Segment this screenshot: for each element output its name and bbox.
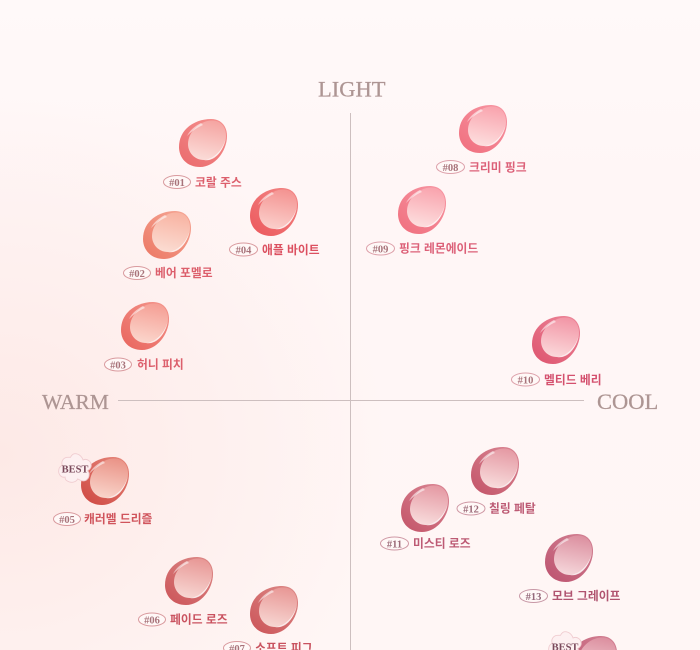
swatch 13 bbox=[520, 534, 621, 603]
swatch 04: #04 bbox=[236, 246, 252, 256]
badge: BEST: BEST bbox=[62, 464, 88, 476]
swatch 02: 베어 포멜로 bbox=[155, 266, 213, 280]
swatch 09: #09 bbox=[373, 244, 388, 256]
swatch 13: #13 bbox=[526, 592, 541, 603]
swatch 08: 크리미 핑크 bbox=[469, 160, 527, 174]
swatch 01 bbox=[164, 119, 242, 190]
swatch 08 bbox=[436, 105, 527, 174]
swatch 10 bbox=[512, 316, 602, 387]
swatch 06: 페이드 로즈 bbox=[170, 612, 228, 626]
swatch 12 bbox=[457, 447, 536, 516]
horizontal axis bbox=[118, 400, 584, 402]
swatch 06 bbox=[138, 557, 228, 626]
swatch 09 bbox=[366, 186, 478, 256]
swatch 05 with BEST badge: 캐러멜 드리즐 bbox=[84, 512, 153, 526]
axis label: COOL: COOL bbox=[597, 389, 658, 414]
swatch 02: #02 bbox=[129, 269, 145, 280]
axis label: LIGHT: LIGHT bbox=[318, 76, 386, 102]
swatch 03 bbox=[104, 302, 184, 372]
swatch 08: #08 bbox=[443, 163, 458, 174]
swatch 07 bbox=[224, 586, 313, 650]
swatch 01: 코랄 주스 bbox=[195, 176, 242, 190]
axis label: WARM: WARM bbox=[42, 390, 109, 414]
swatch 11: #11 bbox=[387, 540, 402, 550]
swatch 09: 핑크 레몬에이드 bbox=[399, 242, 478, 256]
swatch 05 with BEST badge: #05 bbox=[59, 515, 75, 526]
swatch 04: 애플 바이트 bbox=[262, 243, 320, 257]
swatch 03: 허니 피치 bbox=[137, 358, 184, 372]
swatch 10: 멜티드 베리 bbox=[544, 373, 602, 387]
swatch 10: #10 bbox=[518, 376, 533, 386]
swatch 03: #03 bbox=[110, 360, 126, 372]
swatch 04 bbox=[230, 188, 320, 257]
swatch 11: 미스티 로즈 bbox=[413, 536, 471, 550]
vertical axis bbox=[350, 113, 352, 650]
swatch 14 with BEST badge bbox=[549, 632, 617, 650]
swatch 13: 모브 그레이프 bbox=[552, 589, 621, 603]
swatch 11 bbox=[380, 484, 471, 550]
swatch 06: #06 bbox=[144, 616, 160, 626]
swatch 02 bbox=[124, 211, 213, 280]
swatch 12: 칠링 페탈 bbox=[489, 502, 536, 516]
swatch 12: #12 bbox=[463, 504, 479, 516]
swatch 01: #01 bbox=[169, 178, 185, 189]
swatch 05 with BEST badge bbox=[54, 454, 153, 526]
